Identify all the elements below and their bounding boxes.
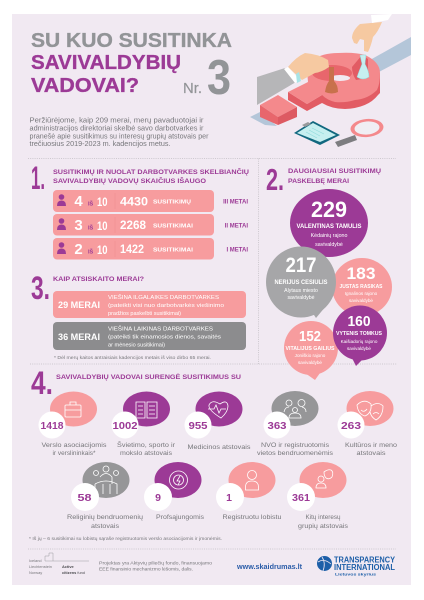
bubble: Valentinas Tamulis xyxy=(290,189,368,257)
bubble: Vytenis Tomkus: VYTENIS TOMKUS xyxy=(336,331,383,337)
item: NGOs: 363 xyxy=(268,420,287,432)
row: second year xyxy=(53,214,248,236)
item: NGOs xyxy=(257,391,334,457)
item: business associations: 1418 xyxy=(40,420,64,432)
title: VADOVAI? xyxy=(31,75,139,97)
hole xyxy=(312,65,352,81)
row: 29 merai xyxy=(53,291,246,318)
item: business associations xyxy=(38,392,107,457)
row: third year: III METAI xyxy=(223,200,248,206)
issue number: Nr. xyxy=(183,80,202,97)
row: first year: 10 xyxy=(97,245,108,257)
section 3 xyxy=(31,270,246,360)
row: second year: II METAI xyxy=(225,224,248,230)
row: 29 merai: 29 MERAI xyxy=(58,300,100,310)
question mark top xyxy=(288,53,380,104)
item: culture xyxy=(338,391,397,457)
row: 36 merai: 36 MERAI xyxy=(58,332,100,342)
intro text: trečiuosius 2019-2023 m. kadencijos metus. xyxy=(30,141,171,148)
item: trade unions: Profsąjungomis xyxy=(156,514,205,521)
bubble: Vytenis Tomkus: Kaišiadorių rajono xyxy=(341,339,378,344)
item: religious communities xyxy=(67,462,143,530)
upper hand xyxy=(352,22,382,52)
bubble: Valentinas Tamulis: savivaldybė xyxy=(315,242,343,248)
section 1 heading xyxy=(53,167,249,185)
row: first year: SUSITIKIMAI xyxy=(153,248,193,254)
cube xyxy=(260,95,297,117)
section 4 number: 4. xyxy=(31,365,53,401)
row: third year: IŠ xyxy=(88,200,94,208)
footer: funder logo: Liechtenstein xyxy=(29,564,52,569)
row: second year: IŠ xyxy=(88,224,94,232)
section 4 heading: SAVIVALDYBIŲ VADOVAI SURENGĖ SUSITIKIMUS SU xyxy=(56,372,241,381)
item: registered lobbyist: Registruotu lobistu xyxy=(222,514,282,521)
item: medicine xyxy=(184,392,251,451)
clipboard xyxy=(294,121,340,145)
Transparency International logo: Lietuvos skyrius xyxy=(335,572,376,576)
footer: funder logo: Norway xyxy=(29,570,42,575)
row: third year: 10 xyxy=(97,197,108,209)
row: first year: IŠ xyxy=(88,248,94,256)
item: education: Švietimo, sporto ir xyxy=(117,440,176,449)
row: first year xyxy=(53,238,248,260)
row: first year: 2 xyxy=(74,241,83,258)
row: 36 merai xyxy=(53,322,246,350)
Transparency International logo: INTERNATIONAL xyxy=(334,563,395,572)
row: 29 merai: VIEŠINA ILGALAIKES DARBOTVARKES xyxy=(108,294,219,301)
bubble: Valentinas Tamulis: 229 xyxy=(311,197,347,222)
bubble: Nerijus Cesiulis: 217 xyxy=(286,254,316,277)
footnote on lobbyists: * Iš jų – 6 susitikimai su lobistų sąraše registruotomis verslo asociacijomis ir įmonėmis. xyxy=(29,536,222,541)
row: second year: 3 xyxy=(74,217,83,234)
illustration: chess on a question mark xyxy=(250,14,411,147)
item: trade unions xyxy=(144,462,205,521)
item: other interest groups: 361 xyxy=(292,492,310,504)
item: trade unions: 9 xyxy=(155,492,161,504)
bubble: Vitalijus Gailius: VITALIJUS GAILIUS xyxy=(286,346,335,352)
bubble: Nerijus Cesiulis xyxy=(266,246,336,318)
bubble: Vitalijus Gailius: Joniškio rajono xyxy=(295,353,326,358)
bubble: Vitalijus Gailius xyxy=(284,321,338,380)
intro text xyxy=(30,118,209,148)
footer: project text xyxy=(99,560,212,572)
item: business associations: Verslo asociacijomis xyxy=(42,442,107,449)
Transparency International logo: TRANSPARENCY xyxy=(334,556,396,564)
bubble: Nerijus Cesiulis: Alytaus miesto xyxy=(284,288,318,294)
bubble: Vytenis Tomkus xyxy=(333,306,387,366)
sleeve xyxy=(257,68,296,105)
item: other interest groups: Kitų interesų xyxy=(306,514,341,521)
item: religious communities: atstovais xyxy=(91,523,120,530)
row: third year: 4430 xyxy=(120,196,148,208)
question mark side xyxy=(288,73,380,111)
footer: project text: EEE finansinio mechanizmo lėšomis, dalis. xyxy=(99,566,193,572)
row: 36 merai: VIEŠINA LAIKINAS DARBOTVARKES xyxy=(108,326,213,332)
section 3 heading: KAIP ATSISKAITO MERAI? xyxy=(53,276,144,283)
item: religious communities: 58 xyxy=(78,492,92,504)
item: business associations: ir verslininkais* xyxy=(52,450,96,457)
website link: www.skaidrumas.lt xyxy=(236,562,303,571)
row: second year: SUSITIKIMAI xyxy=(153,224,193,230)
section 1 xyxy=(31,160,249,260)
item: education: 1002 xyxy=(112,420,138,432)
row: 36 merai: (pateikti tik einamosios dienos, savaitės xyxy=(108,334,221,340)
section 2 heading xyxy=(288,168,381,185)
item: education: mokslo atstovais xyxy=(120,450,173,457)
intro text: pranešė apie susitikimus su interesų grupių atstovais per xyxy=(30,134,209,140)
title: SAVIVALDYBIŲ xyxy=(31,52,181,74)
item: NGOs: vietos bendruomenėmis xyxy=(257,450,334,457)
row: 29 merai: (pateikti visi nuo darbotvarkės viešinimo xyxy=(108,303,225,309)
section 1 heading: SAVIVALDYBIŲ VADOVŲ SKAIČIUS IŠAUGO xyxy=(53,176,206,185)
title xyxy=(31,30,232,97)
magnifier xyxy=(335,135,357,147)
row: first year: 1422 xyxy=(120,244,144,256)
Transparency International logo xyxy=(317,556,396,576)
item: medicine: 955 xyxy=(188,420,208,432)
item: other interest groups xyxy=(287,462,349,530)
row: second year: 2268 xyxy=(120,220,147,232)
issue number xyxy=(183,51,231,105)
intro text: administracijos direktoriai skelbė savo darbotvarkes ir xyxy=(30,126,204,132)
bubble: Nerijus Cesiulis: NERIJUS CESIULIS xyxy=(274,280,328,286)
item: other interest groups: grupių atstovais xyxy=(298,523,349,530)
brown pawn xyxy=(325,67,338,94)
shadow right xyxy=(370,37,411,73)
bubble: Justas Rasikas: savivaldybė xyxy=(349,298,373,303)
bubble: Valentinas Tamulis: VALENTINAS TAMULIS xyxy=(296,224,362,230)
title: SU KUO SUSITINKA xyxy=(31,30,232,52)
bubble: Vytenis Tomkus: 160 xyxy=(348,313,370,330)
section 2 heading: DAUGIAUSIAI SUSITIKIMŲ xyxy=(288,168,381,175)
shadow left xyxy=(250,112,277,126)
item: registered lobbyist xyxy=(216,462,282,521)
footer: project text: Projektas yra Aktyvių piliečių fondo, finansuojamo xyxy=(99,560,212,566)
row: second year: 10 xyxy=(97,221,108,233)
bubble: Vytenis Tomkus: savivaldybė xyxy=(347,346,371,351)
row: third year xyxy=(53,190,248,212)
footer: funder logo xyxy=(29,553,89,575)
bubble: Nerijus Cesiulis: savivaldybė xyxy=(287,295,315,301)
row: first year: I METAI xyxy=(226,248,248,254)
item: culture: Kultūros ir meno xyxy=(345,442,397,449)
row: 29 merai: pradžios paskelbti susitikimai) xyxy=(108,311,181,317)
item: NGOs: NVO ir registruotomis xyxy=(261,442,330,449)
lower hand xyxy=(288,53,329,80)
item: culture: atstovais xyxy=(356,450,386,457)
item: religious communities: Religinių bendruomenių xyxy=(67,514,143,521)
section 1 heading: SUSITIKIMŲ IR NUOLAT DARBOTVARKES SKELBIANČIŲ xyxy=(53,167,249,176)
row: third year: SUSITIKIMŲ xyxy=(153,200,191,206)
section 3 number: 3. xyxy=(31,270,50,306)
section 2 xyxy=(266,162,392,380)
section 1 number: 1. xyxy=(31,160,45,196)
row: 36 merai: ar mėnesio susitikimai) xyxy=(108,342,165,348)
footnote on mayors: * Dėl merų kaitos antraisiais kadencijos metais iš viso dirbo 65 merai. xyxy=(54,355,211,360)
bubble: Vitalijus Gailius: savivaldybė xyxy=(298,360,322,365)
bubble: Vitalijus Gailius: 152 xyxy=(299,328,321,345)
section 2 number: 2. xyxy=(266,162,284,197)
item: medicine: Medicinos atstovais xyxy=(188,444,251,451)
bubble: Justas Rasikas: 183 xyxy=(346,264,376,283)
bubble: Justas Rasikas: Ignalinos rajono xyxy=(345,291,378,296)
bubble: Valentinas Tamulis: Kėdainių rajono xyxy=(311,233,347,239)
item: registered lobbyist: 1 xyxy=(226,492,232,504)
item: education xyxy=(112,392,176,457)
bubble: Justas Rasikas: JUSTAS RASIKAS xyxy=(340,284,383,290)
issue number: 3 xyxy=(207,51,231,105)
section 2 heading: PASKELBĘ MERAI xyxy=(288,178,349,185)
row: third year: 4 xyxy=(74,193,83,210)
item: culture: 263 xyxy=(341,420,361,432)
bubble: Justas Rasikas xyxy=(332,258,392,316)
white pawn xyxy=(357,55,369,79)
intro text: Peržiūrėjome, kaip 209 merai, merų pavaduotojai ir xyxy=(30,118,204,124)
footer: funder logo: Iceland xyxy=(29,558,42,563)
footer: funder logo: Active xyxy=(62,564,75,569)
section 4 xyxy=(29,365,397,541)
footer: funder logo: citizens fund xyxy=(62,570,85,575)
